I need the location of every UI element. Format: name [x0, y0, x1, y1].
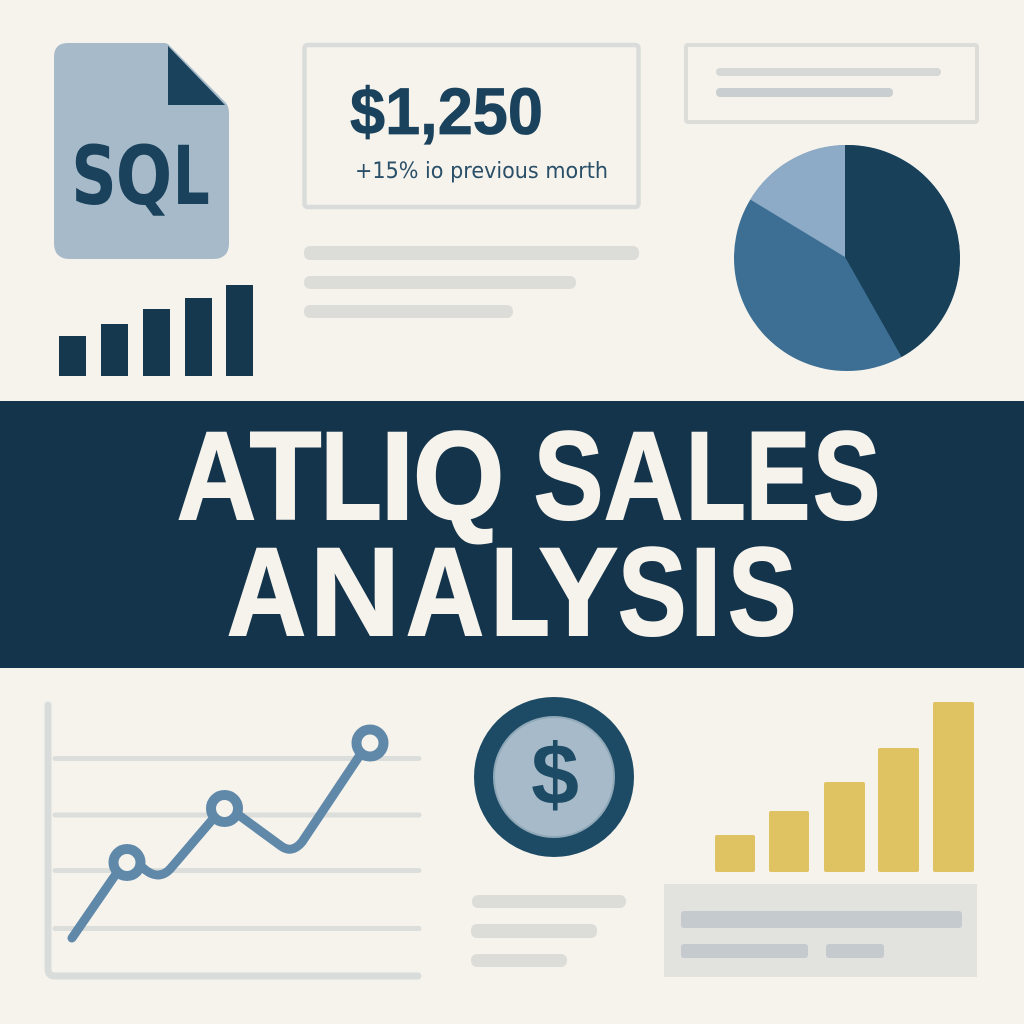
KPI card: +15% io previous morth — [355, 159, 608, 184]
title banner: I — [380, 407, 414, 546]
title banner: N — [310, 523, 400, 662]
title banner: L — [686, 407, 746, 546]
placeholder card — [686, 45, 977, 122]
KPI card — [304, 45, 638, 207]
icon: dollar coin — [474, 697, 634, 857]
icon: SQL file: S — [71, 130, 117, 224]
gold bar chart — [715, 702, 974, 872]
title banner: Q — [413, 407, 504, 546]
small bar chart — [59, 285, 253, 376]
title banner: L — [491, 523, 550, 662]
title banner: Y — [539, 523, 618, 662]
text placeholder lines — [471, 895, 626, 967]
icon: SQL file: Q — [116, 130, 172, 224]
table panel — [664, 884, 977, 977]
line chart — [48, 705, 419, 976]
title banner: A — [227, 523, 306, 662]
icon: SQL file — [54, 43, 229, 259]
title banner — [0, 401, 1024, 668]
title banner: I — [690, 523, 722, 662]
icon: dollar coin: $ — [531, 727, 579, 823]
title banner: A — [604, 407, 683, 546]
title banner: E — [746, 407, 810, 546]
title banner: S — [534, 407, 603, 546]
pie chart — [734, 145, 960, 371]
KPI card: $1,250 — [350, 74, 543, 148]
title banner: T — [250, 407, 321, 546]
text placeholder lines — [304, 246, 639, 318]
title banner: A — [406, 523, 484, 662]
icon: SQL file: L — [173, 130, 210, 224]
title banner: L — [321, 407, 382, 546]
title banner: A — [177, 407, 256, 546]
title banner: S — [813, 407, 880, 546]
title banner: S — [618, 523, 686, 662]
title banner: S — [728, 523, 796, 662]
